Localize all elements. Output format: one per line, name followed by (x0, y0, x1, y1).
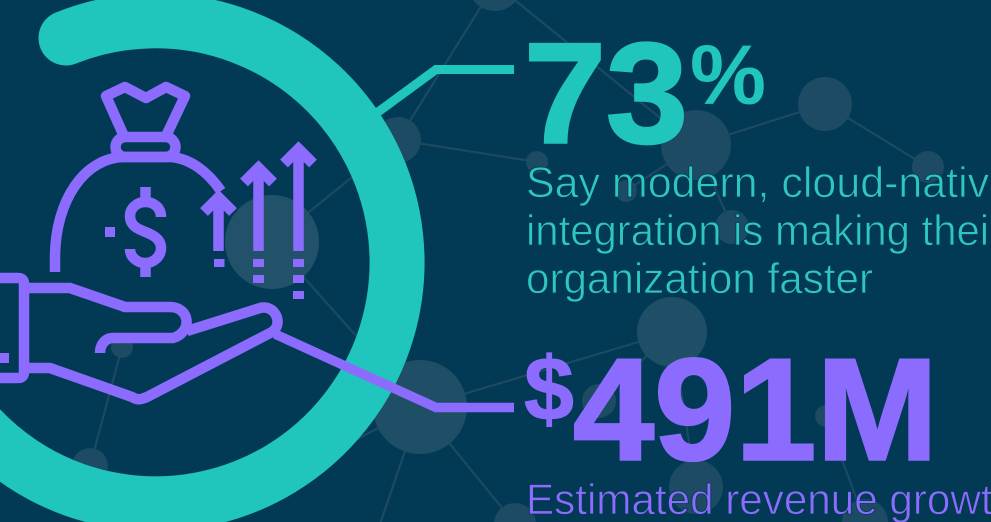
teal progress ring 73 percent (0, 21, 397, 504)
teal connector line (378, 70, 514, 112)
icon: money bag on hand with rising arrows (0, 87, 313, 399)
icon: short arrow (204, 197, 233, 267)
icon: hand (28, 288, 278, 399)
stat: 491 million dollars: 491M (573, 328, 938, 490)
icon: dollar sign (105, 187, 161, 277)
stat: 73 percent (524, 14, 766, 174)
stat: 73 percent: % (690, 28, 766, 122)
stat: 73 percent: 73 (524, 14, 688, 174)
purple connector line (275, 334, 514, 408)
icon: bag knot (106, 87, 185, 134)
text: cloud-native description (526, 159, 991, 303)
icon: bag band (116, 137, 176, 157)
icon: shirt cuff (0, 278, 24, 378)
stat: 491 million dollars: $ (524, 340, 574, 440)
text: cloud-native description: organization faster (526, 255, 873, 303)
icon: tall arrow (284, 149, 313, 299)
icon: bag body (55, 157, 221, 272)
icon: medium arrow (244, 168, 273, 283)
